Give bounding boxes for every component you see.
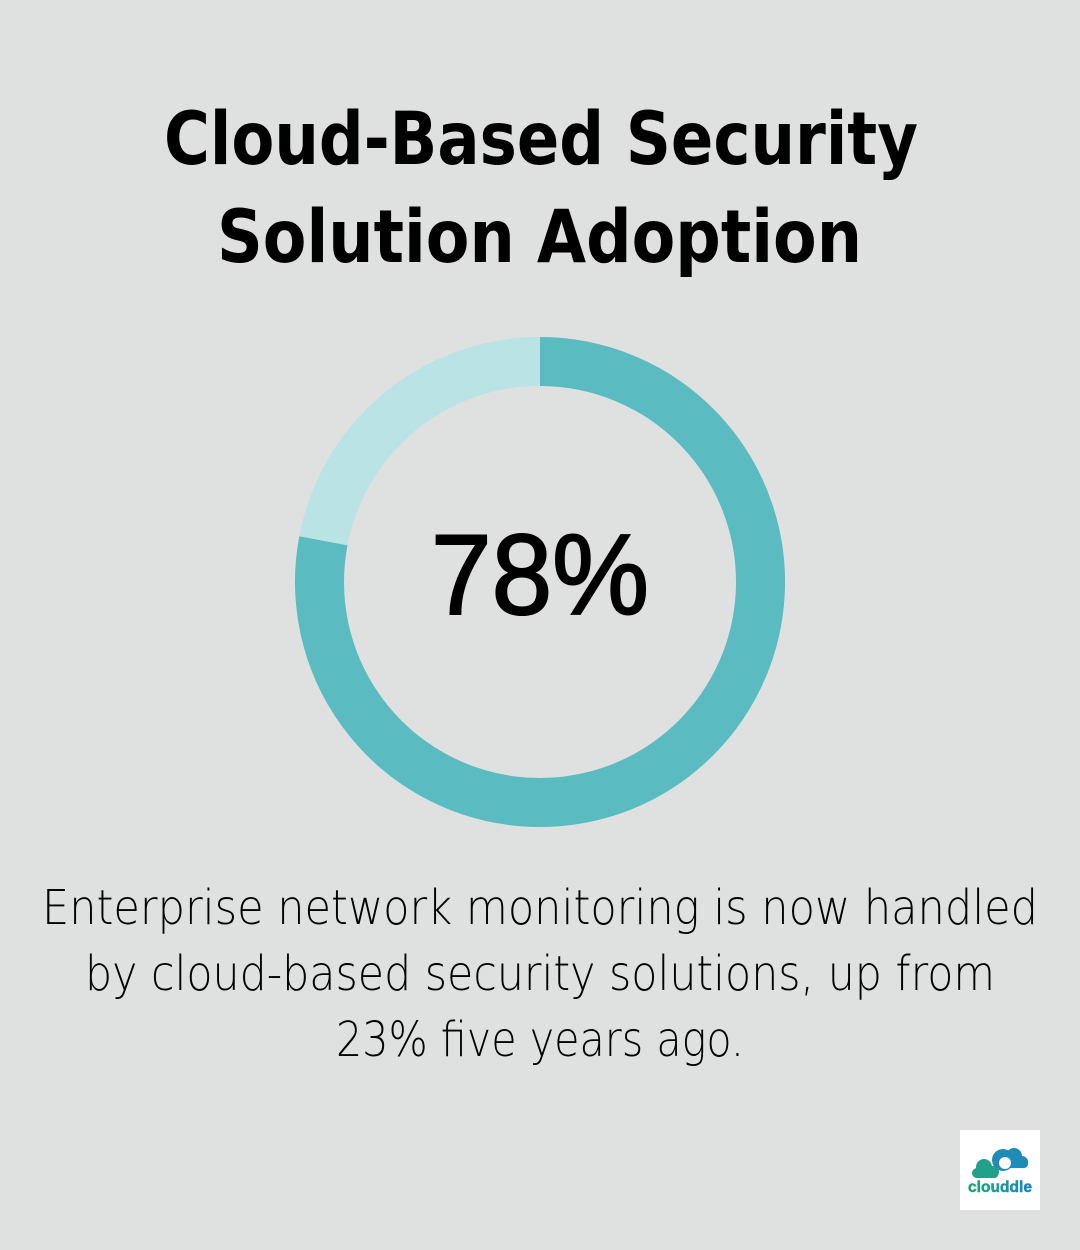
description text: by cloud-based security solutions, up from bbox=[85, 946, 995, 1002]
description text: 23% five years ago. bbox=[336, 1012, 744, 1068]
logo wordmark: clouddle bbox=[968, 1179, 1032, 1196]
title bbox=[164, 97, 918, 280]
icon: left cloud bbox=[972, 1159, 999, 1178]
description text bbox=[42, 880, 1038, 1068]
logo: clouddle bbox=[960, 1130, 1040, 1210]
icon: right cloud bbox=[992, 1148, 1028, 1171]
donut value: 78% bbox=[431, 512, 649, 639]
donut chart: 78 percent bbox=[320, 362, 761, 802]
title: Cloud-Based Security bbox=[164, 97, 918, 182]
title: Solution Adoption bbox=[217, 195, 862, 280]
